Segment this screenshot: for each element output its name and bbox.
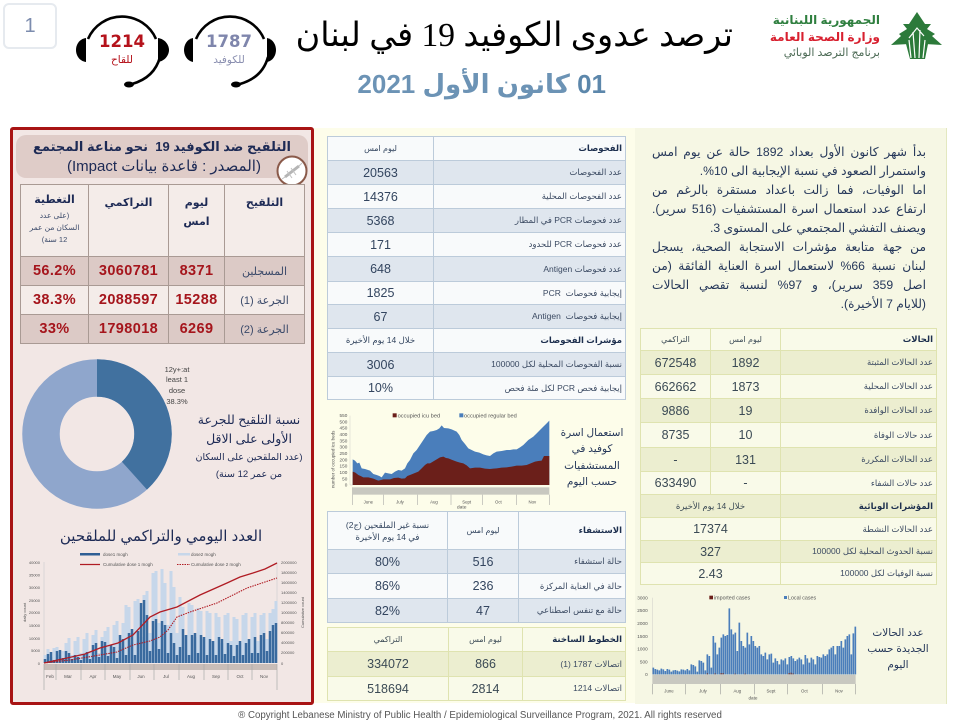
table: tests: 5368: [367, 214, 394, 228]
table: vaccination figures: 2088597: [99, 292, 158, 308]
chart: daily and cumulative vaccinations: 25000: [29, 598, 41, 603]
donut caption: [195, 413, 303, 480]
chart: daily and cumulative vaccinations: Jun: [137, 674, 145, 679]
chart: covid bed occupancy: 300: [340, 445, 348, 450]
caption: bed occupancy: المستشفيات: [564, 460, 620, 472]
table: tests: 3006: [367, 358, 394, 372]
chart: daily and cumulative vaccinations: [22, 552, 305, 690]
table: cases: 9886: [662, 404, 689, 418]
table: hotlines: 866: [475, 657, 496, 671]
table: vaccination figures: 33%: [39, 321, 70, 337]
ministry logo text: وزارة الصحة العامة: [770, 30, 880, 44]
table: tests: الفحوصات: [578, 143, 622, 153]
table: hospitalisation: 82%: [375, 604, 400, 618]
table: tests: 14376: [363, 190, 398, 204]
chart: covid bed occupancy: Oct: [495, 499, 502, 504]
table: cases: 131: [735, 452, 756, 466]
table: tests: 171: [370, 238, 391, 252]
chart: new cases per day: 2500: [637, 608, 648, 613]
table: tests: عدد الفحوصات: [569, 167, 622, 177]
chart: daily and cumulative vaccinations: Oct: [236, 674, 244, 679]
icon: syringe badge: [276, 156, 308, 184]
table: cases: 19: [739, 404, 752, 418]
chart: new cases per day: 3000: [637, 595, 648, 600]
chart: covid bed occupancy: Nov: [528, 499, 537, 504]
text block: daily summary: واستمرار الصعود في نسبة الإيجابية الى 10%.: [700, 164, 926, 178]
chart: daily and cumulative vaccinations: 35000: [29, 573, 41, 578]
table: cases: نسبة الوفيات لكل 100000: [840, 568, 933, 578]
chart: daily and cumulative vaccinations: 600000: [281, 630, 295, 635]
chart: covid bed occupancy: 500: [340, 419, 348, 424]
table: hotlines: الخطوط الساخنة: [552, 634, 622, 644]
chart: daily and cumulative vaccinations: Cumulative dose 2 mogh: [191, 562, 241, 567]
chart: daily and cumulative vaccinations: 0: [38, 661, 41, 666]
table: cases: 17374: [693, 522, 728, 536]
donut caption: نسبة التلقيح للجرعة: [198, 413, 300, 427]
table: hospitalisation: 236: [473, 579, 493, 593]
text block: daily summary: بدأ شهر كانون الأول بعداد 1892 حالة عن يوم امس: [652, 145, 926, 159]
chart: daily and cumulative vaccinations: dose2 mogh: [191, 552, 216, 557]
chart: covid bed occupancy: occupied icu bed: [398, 413, 440, 419]
table: vaccination figures: الجرعة (1): [240, 294, 289, 306]
donut chart: first-dose coverage: [22, 359, 190, 509]
icon: headset vaccine hotline: 1214: [99, 32, 145, 51]
page number box: [3, 3, 57, 49]
table: hotlines: 334072: [367, 657, 409, 671]
table: tests: عدد الفحوصات المحلية: [542, 191, 622, 201]
table: cases: ليوم امس: [729, 335, 762, 344]
chart: new cases per day: Oct: [801, 688, 808, 693]
chart: daily and cumulative vaccinations: 200000: [281, 650, 295, 655]
title: ترصد عدوى الكوفيد 19 في لبنان: [296, 17, 733, 54]
chart: covid bed occupancy: 550: [340, 413, 348, 418]
chart: new cases per day: [637, 595, 856, 701]
text block: daily summary: لبنان نسبة 66% لاستعمال اسرة العناية الفائقة (من: [652, 259, 926, 273]
table: cases: 662662: [655, 380, 696, 394]
donut chart: first-dose coverage: 12y+:at: [165, 365, 190, 374]
chart: daily and cumulative vaccinations: Aug: [187, 674, 195, 679]
table: tests: 10%: [368, 381, 393, 395]
chart: daily and cumulative vaccinations: Mar: [64, 674, 72, 679]
table: vaccination figures: التغطية: [34, 194, 75, 206]
caption: new cases per day: عدد الحالات: [872, 627, 924, 639]
chart: covid bed occupancy: 200: [340, 457, 348, 462]
table: cases: -: [673, 452, 678, 466]
ministry logo text: [770, 13, 880, 59]
chart: new cases per day: 1500: [637, 634, 648, 639]
table: cases: نسبة الحدوث المحلية لكل 100000: [812, 546, 933, 556]
chart: daily and cumulative vaccinations: 2000000: [281, 560, 297, 565]
icon: headset covid hotline: للكوفيد: [213, 54, 245, 66]
table: tests: 648: [370, 262, 391, 276]
chart: covid bed occupancy: number of occupied icu beds: [331, 430, 336, 488]
table: cases: [640, 328, 937, 585]
chart: covid bed occupancy: [331, 413, 550, 511]
table: vaccination figures: (على عدد: [40, 211, 69, 220]
chart: new cases per day: Local cases: [788, 595, 816, 601]
table: hospitalisation: 516: [473, 554, 493, 568]
chart: daily and cumulative vaccinations: 10000: [29, 636, 41, 641]
chart: daily and cumulative vaccinations: 1400000: [281, 590, 297, 595]
caption: bed occupancy: كوفيد في: [572, 443, 612, 455]
chart: daily and cumulative vaccinations: Nov: [260, 674, 269, 679]
table: cases: 1892: [732, 356, 759, 370]
table: hotlines: ليوم امس: [469, 635, 502, 644]
page number box: 1: [24, 15, 36, 37]
vaccination heading band: التلقيح ضد الكوفيد 19 نحو مناعة المجتمع: [33, 139, 291, 154]
table: tests: نسبة الفحوصات المحلية لكل 100000: [491, 359, 622, 369]
icon: headset covid hotline: [184, 15, 276, 88]
table: hospitalisation: 47: [476, 604, 490, 618]
icon: headset vaccine hotline: [76, 15, 169, 88]
table: tests: عدد فحوصات PCR للحدود: [529, 239, 622, 249]
text block: daily summary: [652, 144, 926, 311]
chart: covid bed occupancy: date: [457, 505, 467, 511]
chart: daily and cumulative vaccinations: 15000: [29, 623, 41, 628]
donut caption: (عدد الملقحين على السكان: [195, 452, 303, 463]
table: vaccination figures: 12 سنة): [42, 235, 67, 244]
table: cases: عدد حالات الوفاة: [874, 430, 933, 440]
chart: daily and cumulative vaccinations: Jul: [163, 674, 169, 679]
table: vaccination figures: التراكمي: [105, 197, 152, 209]
chart: covid bed occupancy: 150: [340, 464, 348, 469]
text block: daily summary: اما الوفيات، فما زالت باعداد مستقرة بالرغم من: [652, 183, 926, 197]
panel: middle column background: [314, 128, 635, 703]
heading: daily and cumulative vaccinated: العدد اليومي والتراكمي للملقحين: [60, 528, 262, 545]
table: cases: عدد الحالات المثبتة: [867, 357, 933, 367]
icon: headset vaccine hotline: للقاح: [111, 54, 133, 66]
caption: new cases per day: اليوم: [887, 659, 909, 671]
chart: covid bed occupancy: occupied regular bed: [464, 413, 517, 419]
donut caption: من عمر 12 سنة): [216, 469, 282, 480]
chart: new cases per day: Nov: [835, 688, 844, 693]
table: vaccination figures: المسجلين: [242, 266, 287, 278]
table: cases: 633490: [655, 476, 696, 490]
chart: new cases per day: date: [748, 696, 758, 701]
table: hospitalisation: 86%: [375, 579, 400, 593]
vaccination heading band: [16, 135, 308, 178]
donut chart: first-dose coverage: least 1: [166, 375, 188, 384]
table: tests: إيجابية فحص PCR لكل مئة فحص: [505, 382, 622, 392]
table: vaccination figures: 3060781: [99, 263, 158, 279]
chart: new cases per day: 2000: [637, 621, 648, 626]
chart: daily and cumulative vaccinations: 40000: [29, 560, 41, 565]
table: cases: عدد الحالات الوافدة: [864, 405, 933, 415]
table: tests: عدد فحوصات PCR في المطار: [515, 215, 622, 225]
table: vaccination figures: 1798018: [99, 321, 158, 337]
ministry logo text: برنامج الترصد الوبائي: [784, 47, 880, 59]
chart: new cases per day: 500: [640, 659, 648, 664]
chart: daily and cumulative vaccinations: daily count: [22, 602, 27, 622]
chart: new cases per day: 1000: [637, 647, 648, 652]
table: hotlines: اتصالات 1214: [573, 683, 622, 693]
table: hospitalisation: ليوم امس: [467, 526, 499, 535]
table: vaccination figures: السكان من عمر: [30, 223, 79, 232]
text block: daily summary: ارتفاع عدد استعمال اسرة المستشفيات (516 سرير).: [652, 202, 926, 216]
chart: daily and cumulative vaccinations: Cumulative dose 1 mogh: [103, 562, 153, 567]
table: tests: 20563: [363, 166, 398, 180]
table: hotlines: 2814: [472, 682, 499, 696]
chart: daily and cumulative vaccinations: Sep: [212, 674, 220, 679]
chart: covid bed occupancy: July: [396, 499, 405, 504]
table: tests: خلال 14 يوم الأخيرة: [346, 335, 415, 345]
table: vaccination figures: [20, 184, 305, 344]
table: tests: إيجابية فحوصات PCR: [543, 288, 622, 298]
table: hospitalisation: حالة في العناية المركزة: [540, 580, 622, 590]
table: tests: 1825: [367, 286, 394, 300]
chart: covid bed occupancy: 100: [340, 470, 348, 475]
chart: covid bed occupancy: 350: [340, 438, 348, 443]
chart: daily and cumulative vaccinations: 20000: [29, 610, 41, 615]
table: hotlines: اتصالات 1787 (1): [560, 658, 622, 668]
icon: cedar logo: [891, 12, 942, 59]
table: vaccination figures: 56.2%: [33, 263, 76, 279]
chart: daily and cumulative vaccinations: dose1 mogh: [103, 552, 128, 557]
chart: daily and cumulative vaccinations: Feb: [46, 674, 54, 679]
table: tests: عدد فحوصات Antigen: [543, 264, 622, 274]
chart: new cases per day: Aug: [733, 688, 742, 693]
chart: new cases per day: July: [699, 688, 708, 693]
ministry logo text: الجمهورية اللبنانية: [773, 13, 880, 27]
table: hospitalisation: نسبة غير الملقحين (ج2): [346, 520, 429, 530]
chart: new cases per day: June: [664, 688, 674, 693]
chart: daily and cumulative vaccinations: 30000: [29, 585, 41, 590]
chart: new cases per day: imported cases: [714, 595, 750, 601]
table: cases: خلال 14 يوم الأخيرة: [676, 500, 745, 510]
table: vaccination figures: 8371: [180, 263, 213, 279]
table: hospitalisation: [327, 511, 626, 623]
table: hospitalisation: حالة مع تنفس اصطناعي: [537, 605, 622, 615]
chart: daily and cumulative vaccinations: 0: [281, 661, 284, 666]
table: vaccination figures: 15288: [175, 292, 218, 308]
chart: covid bed occupancy: 0: [345, 483, 348, 488]
table: vaccination figures: 38.3%: [33, 292, 76, 308]
donut caption: الأولى على الاقل: [206, 432, 292, 446]
text block: daily summary: اصل 359 سرير)، و 97% لنسبة تقصي الحالات: [652, 278, 926, 292]
text block: daily summary: ويصنف التفشي المجتمعي على المستوى 3.: [710, 221, 926, 235]
panel: vaccination: [10, 127, 314, 705]
caption: bed occupancy: [561, 427, 623, 488]
caption: new cases per day: الجديدة حسب: [867, 643, 929, 655]
chart: daily and cumulative vaccinations: 1600000: [281, 580, 297, 585]
chart: covid bed occupancy: 400: [340, 432, 348, 437]
table: cases: 327: [700, 544, 721, 558]
chart: daily and cumulative vaccinations: 400000: [281, 640, 295, 645]
table: hospitalisation: الاستشفاء: [579, 525, 622, 535]
chart: daily and cumulative vaccinations: 5000: [31, 648, 41, 653]
table: cases: -: [743, 476, 748, 490]
table: hospitalisation: حالة استشفاء: [574, 556, 622, 566]
table: tests: [327, 136, 626, 400]
table: vaccination figures: ليوم امس: [183, 197, 210, 228]
chart: daily and cumulative vaccinations: 1000000: [281, 610, 297, 615]
chart: new cases per day: 0: [645, 672, 648, 677]
chart: covid bed occupancy: 50: [342, 476, 348, 481]
table: hotlines: التراكمي: [374, 635, 402, 644]
caption: bed occupancy: استعمال اسرة: [561, 427, 623, 439]
table: hospitalisation: 80%: [375, 554, 400, 568]
chart: covid bed occupancy: Sept: [462, 499, 472, 504]
caption: new cases per day: [867, 627, 929, 671]
table: tests: ليوم امس: [364, 144, 397, 153]
chart: daily and cumulative vaccinations: Cumulative count: [300, 596, 305, 628]
donut chart: first-dose coverage: 38.3%: [166, 397, 188, 406]
table: cases: الحالات: [903, 334, 933, 344]
chart: new cases per day: Sept: [767, 688, 776, 693]
chart: covid bed occupancy: 250: [340, 451, 348, 456]
chart: daily and cumulative vaccinations: Apr: [89, 674, 97, 679]
table: cases: عدد الحالات النشطة: [862, 524, 933, 534]
table: cases: 8735: [662, 428, 689, 442]
donut chart: first-dose coverage: dose: [169, 386, 185, 395]
chart: daily and cumulative vaccinations: May: [113, 674, 122, 679]
caption: bed occupancy: حسب اليوم: [567, 476, 617, 488]
table: vaccination figures: التلقيح: [246, 197, 283, 209]
chart: daily and cumulative vaccinations: 1200000: [281, 600, 297, 605]
text block: daily summary: من جهة متابعة مؤشرات الاستجابة الصحية، يسجل: [652, 240, 926, 254]
icon: headset covid hotline: 1787: [206, 32, 252, 51]
table: cases: 2.43: [698, 566, 723, 580]
table: vaccination figures: الجرعة (2): [240, 324, 289, 336]
table: hospitalisation: في 14 يوم الأخيرة: [356, 532, 419, 542]
table: hotlines: [327, 627, 626, 701]
table: cases: عدد حالات الشفاء: [871, 478, 933, 488]
chart: daily and cumulative vaccinations: 1800000: [281, 570, 297, 575]
chart: covid bed occupancy: Aug: [430, 499, 438, 504]
table: cases: التراكمي: [661, 335, 690, 344]
table: cases: المؤشرات الوبائية: [859, 500, 933, 510]
chart: daily and cumulative vaccinations: 800000: [281, 620, 295, 625]
text block: daily summary: (للايام 7 الأخيرة).: [841, 297, 926, 311]
table: cases: عدد الحالات المحلية: [864, 381, 933, 391]
chart: covid bed occupancy: 450: [340, 426, 348, 431]
table: cases: 1873: [732, 380, 759, 394]
table: vaccination figures: 6269: [180, 321, 213, 337]
table: cases: 10: [739, 428, 752, 442]
table: cases: 672548: [655, 356, 696, 370]
chart: covid bed occupancy: June: [364, 499, 374, 504]
table: tests: مؤشرات الفحوصات: [540, 335, 622, 345]
table: hotlines: 518694: [367, 682, 409, 696]
panel: right column background: [635, 128, 947, 704]
date heading: 01 كانون الأول 2021: [357, 69, 606, 99]
table: cases: عدد الحالات المكررة: [861, 454, 933, 464]
table: tests: إيجابية فحوصات Antigen: [532, 311, 622, 321]
vaccination heading band: (المصدر : قاعدة بيانات Impact): [67, 158, 261, 175]
table: tests: 67: [374, 310, 387, 324]
